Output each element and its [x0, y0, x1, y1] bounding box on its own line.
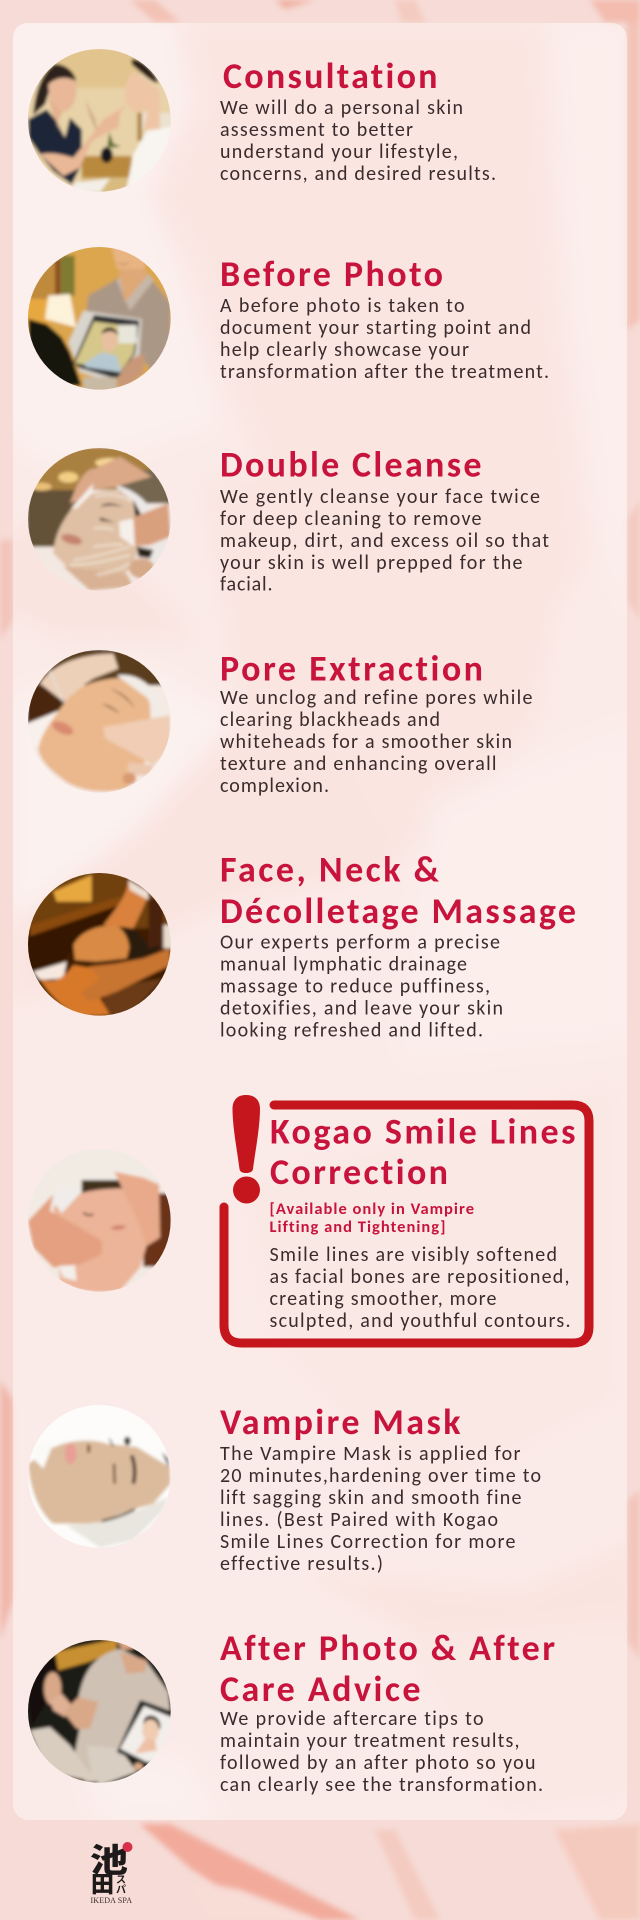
step: Vampire Mask — [20, 1397, 541, 1576]
body text: massage: Our experts perform a precise — [220, 930, 500, 954]
body text: Double Cleanse: makeup, dirt, and excess oil so that — [220, 529, 549, 553]
sub-heading: availability note: [Available only in Vampire — [270, 1199, 474, 1219]
body text: massage: manual lymphatic drainage — [220, 952, 467, 976]
step: Consultation — [28, 49, 495, 192]
logo: Ikeda Spa: 池 — [90, 1834, 128, 1882]
body text: Consultation: understand your lifestyle, — [220, 140, 458, 164]
body text: Pore Extraction: We unclog and refine pores while — [220, 686, 533, 710]
body text: Pore Extraction: clearing blackheads and — [220, 708, 440, 732]
photo: vampire mask — [28, 1405, 170, 1548]
sub-heading: availability note: Lifting and Tightening] — [270, 1217, 446, 1237]
heading: Before Photo: Before Photo — [220, 252, 443, 296]
body text: After Photo: can clearly see the transformation. — [220, 1773, 543, 1797]
heading: Vampire Mask: Vampire Mask — [220, 1400, 461, 1444]
body text: Before Photo — [220, 294, 549, 384]
photo: consultation — [28, 49, 171, 192]
heading: After Photo & After Care Advice — [220, 1626, 555, 1711]
body text: massage: looking refreshed and lifted. — [220, 1018, 483, 1042]
heading: Pore Extraction: Pore Extraction — [220, 646, 483, 690]
body text: Kogao: sculpted, and youthful contours. — [270, 1309, 570, 1333]
body text: After Photo — [220, 1707, 543, 1797]
icon: exclamation mark — [232, 1095, 260, 1204]
body text: Consultation: assessment to better — [220, 118, 413, 142]
body text: Consultation: concerns, and desired results. — [220, 162, 496, 186]
body text: Double Cleanse: facial. — [220, 572, 272, 596]
body text: Before Photo: help clearly showcase your — [220, 338, 469, 362]
callout: red bordered box — [224, 1105, 589, 1343]
heading: Face, Neck & Décolletage Massage — [220, 848, 576, 933]
logo: Ikeda Spa: ス — [116, 1871, 126, 1886]
body text: After Photo: We provide aftercare tips to — [220, 1707, 484, 1731]
body text: Pore Extraction: whiteheads for a smoother skin — [220, 730, 512, 754]
body text: Pore Extraction — [220, 686, 533, 798]
step: Kogao Smile Lines Correction — [20, 1095, 589, 1343]
body text: massage — [220, 930, 503, 1042]
body text: Vampire Mask: 20 minutes,hardening over time to — [220, 1464, 541, 1488]
logo: Ikeda Spa: 田 — [91, 1865, 114, 1899]
body text: Vampire Mask: The Vampire Mask is applied for — [220, 1442, 521, 1466]
photo: after photo on tablet — [28, 1640, 171, 1783]
body text: Before Photo: A before photo is taken to — [220, 294, 464, 318]
step: Pore Extraction — [28, 650, 532, 796]
body text: Consultation — [220, 96, 496, 186]
heading: After Photo & After Care Advice: After Photo & After — [220, 1626, 555, 1670]
photo: massage — [28, 873, 171, 1016]
body text: massage: detoxifies, and leave your skin — [220, 996, 503, 1020]
body text: Vampire Mask — [220, 1442, 541, 1576]
body text: Kogao: as facial bones are repositioned, — [270, 1265, 570, 1289]
logo: Ikeda Spa: パ — [116, 1881, 126, 1896]
body text: Kogao — [270, 1243, 570, 1333]
body text: Kogao: Smile lines are visibly softened — [270, 1243, 557, 1267]
body text: After Photo: followed by an after photo so you — [220, 1751, 536, 1775]
body text: After Photo: maintain your treatment results, — [220, 1729, 520, 1753]
step: After Photo & After Care Advice — [20, 1626, 555, 1797]
photo: pore extraction — [28, 650, 170, 792]
heading: Consultation: Consultation — [223, 54, 438, 98]
logo: Ikeda Spa: IKEDA SPA — [90, 1896, 132, 1905]
photo: kogao facial — [28, 1149, 171, 1292]
body text: Consultation: We will do a personal skin — [220, 96, 463, 120]
heading: Face, Neck & Décolletage Massage: Face, Neck & — [220, 848, 440, 892]
heading: Kogao Smile Lines Correction — [270, 1110, 576, 1194]
heading: Kogao Smile Lines Correction: Kogao Smile Lines — [270, 1110, 576, 1154]
step: Before Photo — [28, 247, 548, 390]
body text: Before Photo: transformation after the treatment. — [220, 360, 549, 384]
heading: After Photo & After Care Advice: Care Advice — [220, 1667, 420, 1711]
body text: Pore Extraction: complexion. — [220, 774, 329, 798]
body text: Pore Extraction: texture and enhancing overall — [220, 752, 496, 776]
photo: cleansing the face — [28, 448, 170, 590]
heading: Double Cleanse: Double Cleanse — [220, 442, 482, 486]
heading: Kogao Smile Lines Correction: Correction — [270, 1150, 448, 1194]
step: Double Cleanse — [28, 448, 549, 590]
photo: before photo on tablet — [28, 247, 171, 390]
heading: Face, Neck & Décolletage Massage: Décolletage Massage — [220, 889, 576, 933]
body text: Vampire Mask: lift sagging skin and smooth fine — [220, 1486, 522, 1510]
body text: massage: massage to reduce puffiness, — [220, 974, 490, 998]
body text: Double Cleanse: your skin is well prepped for the — [220, 551, 523, 575]
body text: Double Cleanse: We gently cleanse your face twice — [220, 485, 540, 509]
body text: Vampire Mask: effective results.) — [220, 1552, 383, 1576]
sub-heading: availability note — [270, 1199, 474, 1237]
body text: Double Cleanse — [220, 485, 549, 596]
step: Face, Neck & Décolletage Massage — [20, 848, 576, 1042]
body text: Vampire Mask: lines. (Best Paired with Kogao — [220, 1508, 498, 1532]
logo: Ikeda Spa — [90, 1834, 132, 1905]
body text: Kogao: creating smoother, more — [270, 1287, 497, 1311]
body text: Double Cleanse: for deep cleaning to remove — [220, 507, 482, 531]
body text: Before Photo: document your starting point and — [220, 316, 531, 340]
body text: Vampire Mask: Smile Lines Correction for more — [220, 1530, 516, 1554]
